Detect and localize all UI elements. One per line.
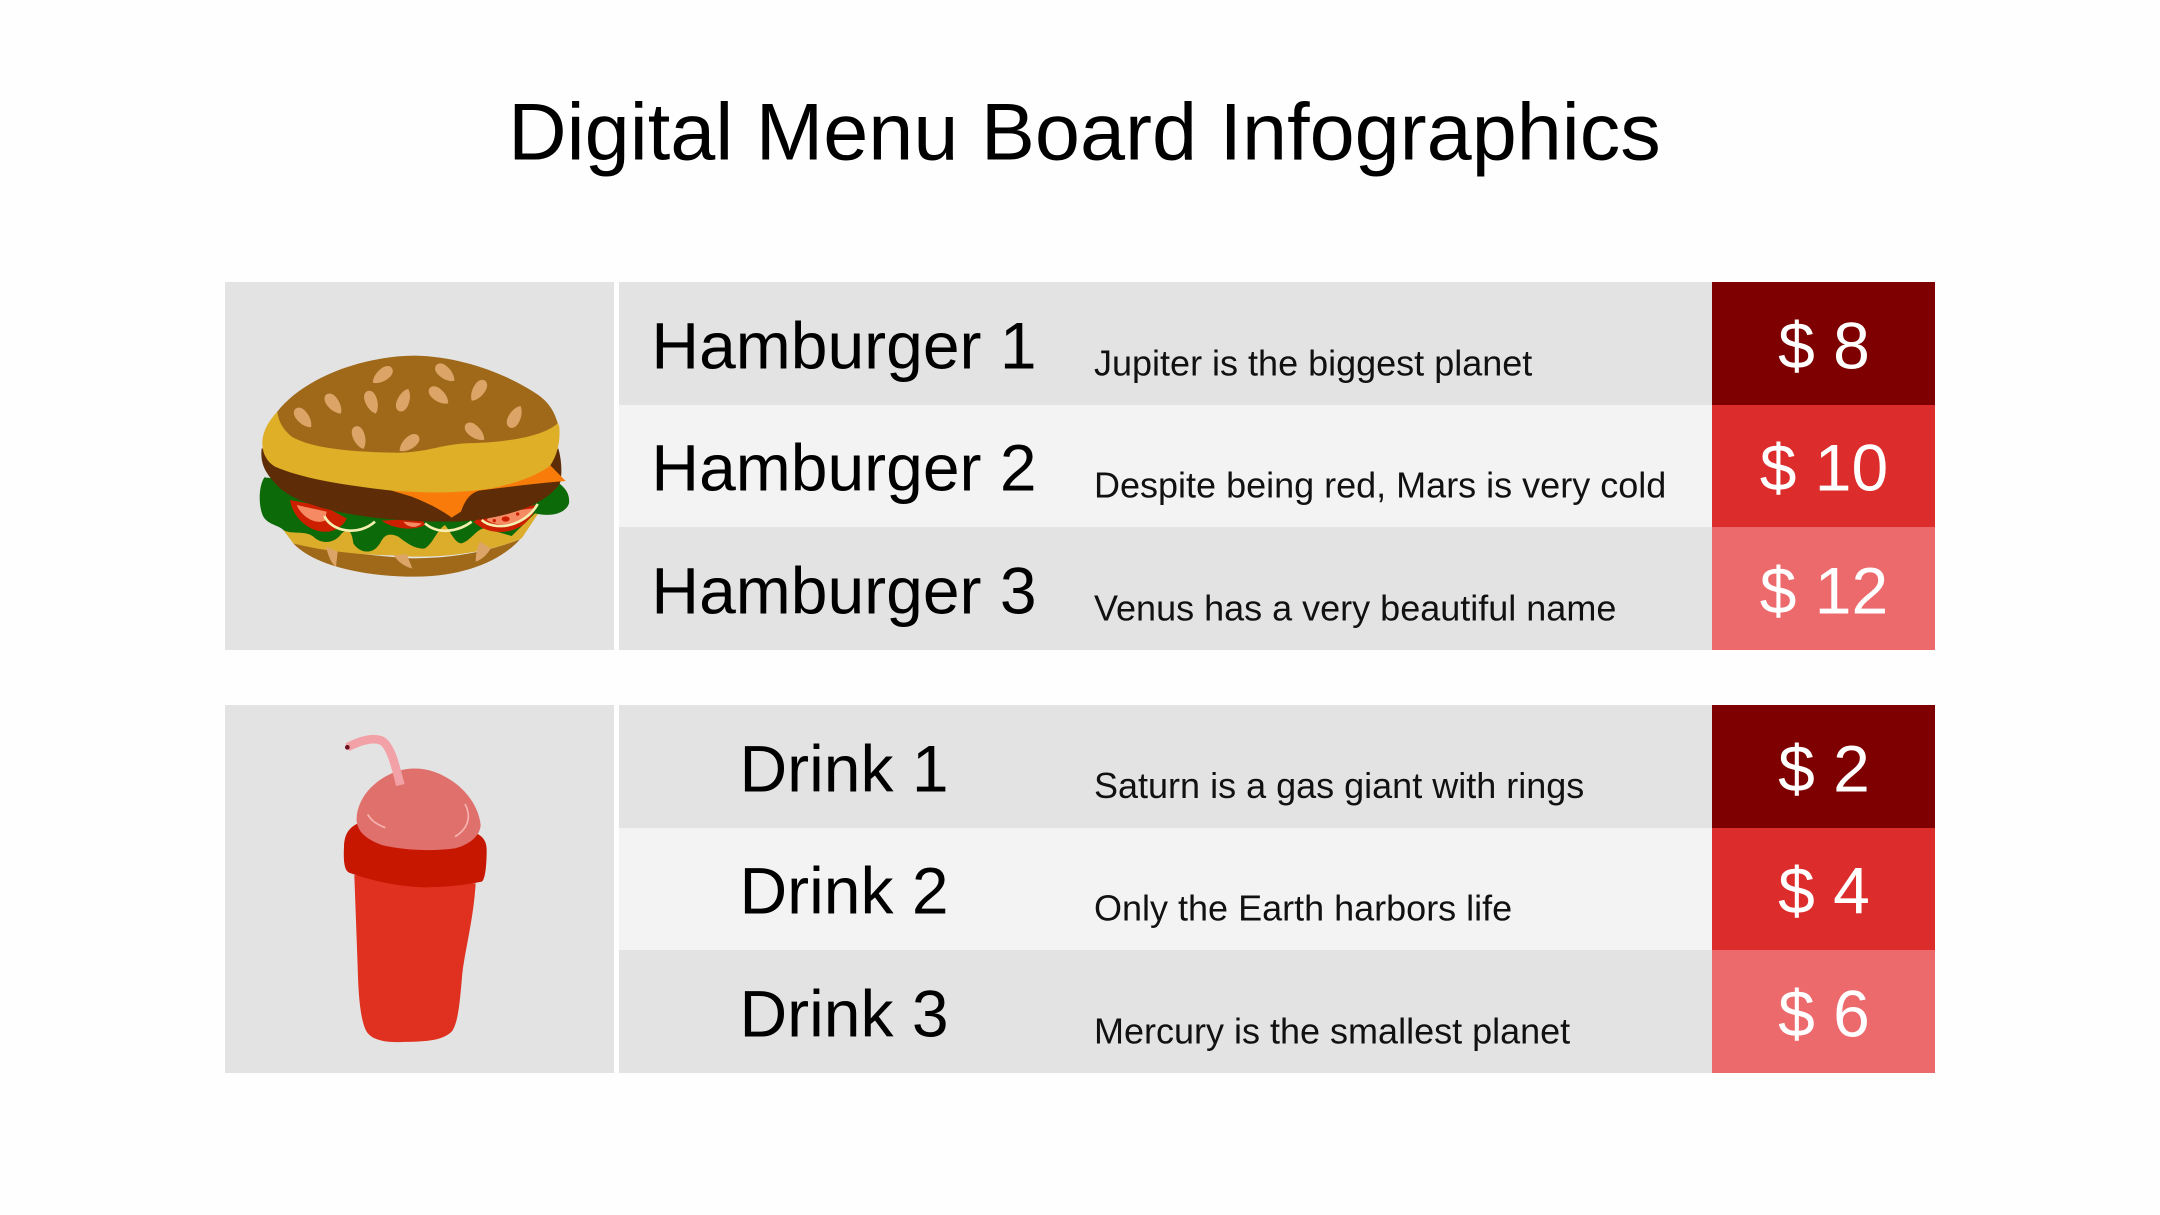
row: hamburger 2: Despite being red, Mars is very cold <box>1094 465 1666 506</box>
row: hamburger 1: $ 8 <box>1778 308 1870 382</box>
row: drink 2: $ 4 <box>1778 854 1870 928</box>
row: hamburger 1: Hamburger 1 <box>651 308 1037 382</box>
row: drink 2: Drink 2 <box>739 854 949 928</box>
icon: drink cup <box>344 739 487 1042</box>
icon: hamburger <box>260 356 569 577</box>
title: Digital Menu Board Infographics <box>508 87 1661 177</box>
row: hamburger 3: Hamburger 3 <box>651 554 1037 628</box>
row: drink 3 <box>619 950 1935 1073</box>
row: drink 1 <box>619 705 1935 828</box>
row: hamburger 3: $ 12 <box>1760 554 1888 628</box>
row: drink 2 <box>619 828 1935 950</box>
panel: hamburger image background <box>225 282 614 650</box>
row: hamburger 2 <box>619 405 1935 527</box>
row: hamburger 3 <box>619 527 1935 650</box>
row: drink 3: Mercury is the smallest planet <box>1094 1010 1570 1052</box>
panel: drink menu <box>225 705 1935 1073</box>
panel: drink image background <box>225 705 614 1073</box>
panel: hamburger menu <box>225 282 1935 650</box>
row: hamburger 1 <box>619 282 1935 405</box>
row: drink 1: Drink 1 <box>739 731 949 805</box>
row: drink 3: Drink 3 <box>739 976 949 1050</box>
row: hamburger 1: Jupiter is the biggest planet <box>1094 342 1532 384</box>
row: drink 1: $ 2 <box>1778 731 1870 805</box>
row: drink 3: $ 6 <box>1778 976 1870 1050</box>
row: drink 1: Saturn is a gas giant with rings <box>1094 765 1584 806</box>
row: hamburger 3: Venus has a very beautiful name <box>1094 588 1616 628</box>
row: drink 2: Only the Earth harbors life <box>1094 888 1512 929</box>
row: hamburger 2: $ 10 <box>1760 431 1888 505</box>
row: hamburger 2: Hamburger 2 <box>651 431 1037 505</box>
